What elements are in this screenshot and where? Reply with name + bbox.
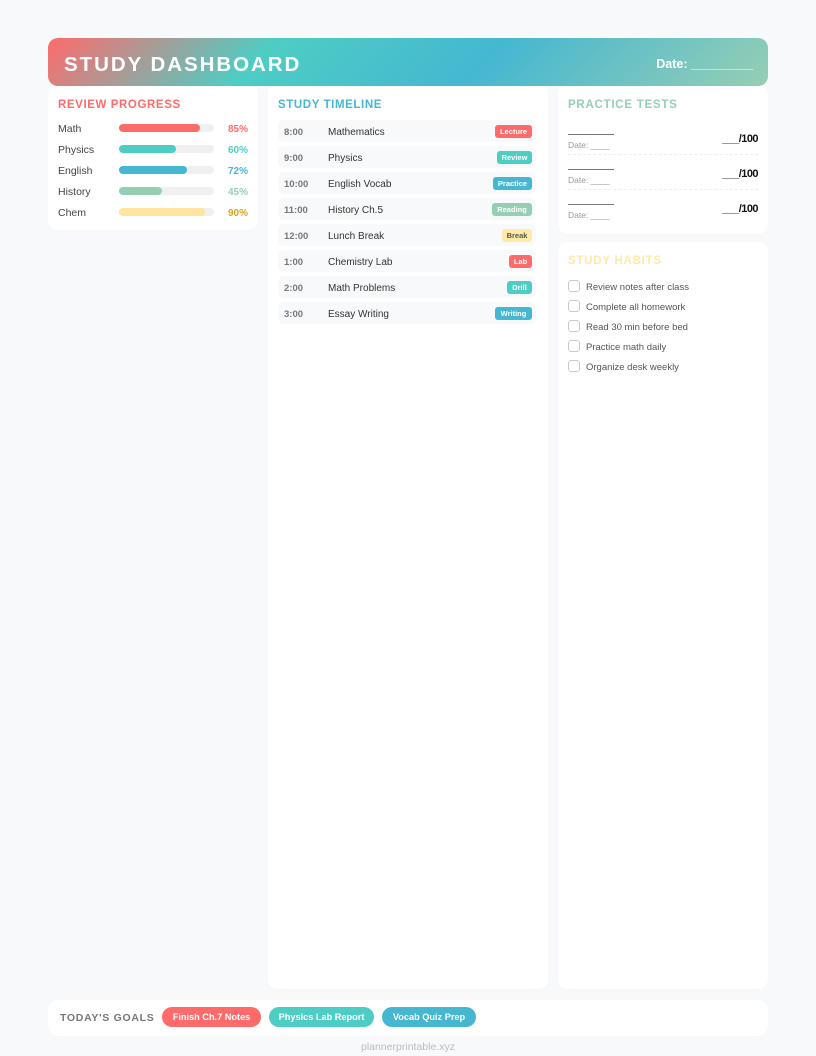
timeline row: 11:00: Reading bbox=[497, 205, 527, 214]
timeline row: 3:00: Writing bbox=[501, 309, 526, 318]
progress row: Math bbox=[58, 123, 248, 135]
goal pill: vocab quiz: Vocab Quiz Prep bbox=[393, 1012, 465, 1022]
goal pill: lab report bbox=[269, 1007, 374, 1027]
heading: practice tests: PRACTICE TESTS bbox=[568, 99, 678, 111]
habit: homework: Complete all homework bbox=[586, 302, 685, 313]
goal pill: lab report: Physics Lab Report bbox=[279, 1012, 364, 1022]
timeline row: 10:00: Practice bbox=[498, 179, 527, 188]
timeline row: 1:00: 1:00 bbox=[284, 257, 303, 268]
timeline row: 3:00 bbox=[278, 302, 536, 324]
timeline row: 8:00: Lecture bbox=[500, 127, 527, 136]
test row 1: ___/100 bbox=[722, 133, 758, 145]
progress row: Physics: Physics bbox=[58, 144, 94, 156]
timeline row: 1:00 bbox=[278, 250, 536, 272]
test row 2: ___/100 bbox=[722, 168, 758, 180]
heading: today's goals: TODAY'S GOALS bbox=[60, 1012, 154, 1024]
habit: reading: Read 30 min before bed bbox=[586, 322, 688, 333]
timeline row: 3:00: Essay Writing bbox=[328, 309, 389, 320]
progress row: Math: 85% bbox=[228, 124, 248, 135]
panel: study habits bbox=[558, 242, 768, 989]
timeline row: 10:00 bbox=[278, 172, 536, 194]
progress row: English: English bbox=[58, 165, 92, 177]
timeline row: 12:00 bbox=[278, 224, 536, 246]
habit: desk: Organize desk weekly bbox=[586, 362, 679, 373]
timeline row: 3:00: 3:00 bbox=[284, 309, 303, 320]
title: STUDY DASHBOARD bbox=[64, 53, 301, 76]
timeline row: 2:00: Math Problems bbox=[328, 283, 395, 294]
timeline row: 8:00: 8:00 bbox=[284, 127, 303, 138]
test row 1 bbox=[568, 120, 758, 155]
date field: Date: __________ bbox=[656, 57, 752, 71]
progress row: English: 72% bbox=[228, 166, 248, 177]
progress row: Physics bbox=[58, 144, 248, 156]
habit: review notes: Review notes after class bbox=[586, 282, 689, 293]
timeline row: 11:00: History Ch.5 bbox=[328, 205, 383, 216]
test row 1: Date: ____ bbox=[568, 140, 610, 150]
panel: today's goals bbox=[48, 1000, 768, 1036]
test row 2: Date: ____ bbox=[568, 175, 610, 185]
progress row: Chem: Chem bbox=[58, 207, 86, 219]
header banner bbox=[48, 38, 768, 86]
timeline row: 8:00: Mathematics bbox=[328, 127, 385, 138]
timeline row: 12:00: Lunch Break bbox=[328, 231, 384, 242]
footer source: plannerprintable.xyz bbox=[361, 1041, 455, 1053]
goal pill: vocab quiz bbox=[382, 1007, 476, 1027]
progress row: Chem bbox=[58, 207, 248, 219]
timeline row: 10:00: 10:00 bbox=[284, 179, 308, 190]
timeline row: 9:00: 9:00 bbox=[284, 153, 303, 164]
timeline row: 2:00: 2:00 bbox=[284, 283, 303, 294]
goal pill: finish notes bbox=[162, 1007, 261, 1027]
progress row: History: History bbox=[58, 186, 91, 198]
test row 3: ___/100 bbox=[722, 203, 758, 215]
test row 2 bbox=[568, 155, 758, 190]
timeline row: 12:00: 12:00 bbox=[284, 231, 308, 242]
timeline row: 12:00: Break bbox=[507, 231, 527, 240]
progress row: English bbox=[58, 165, 248, 177]
habit: math: Practice math daily bbox=[586, 342, 666, 353]
progress row: Physics: 60% bbox=[228, 145, 248, 156]
timeline row: 1:00: Lab bbox=[514, 257, 527, 266]
progress row: Math: Math bbox=[58, 123, 81, 135]
heading: review progress: REVIEW PROGRESS bbox=[58, 99, 181, 111]
heading: study timeline: STUDY TIMELINE bbox=[278, 99, 382, 111]
timeline row: 11:00 bbox=[278, 198, 536, 220]
test row 3: Date: ____ bbox=[568, 210, 610, 220]
progress row: History bbox=[58, 186, 248, 198]
progress row: Chem: 90% bbox=[228, 208, 248, 219]
timeline row: 2:00: Drill bbox=[512, 283, 527, 292]
panel: practice tests bbox=[558, 84, 768, 234]
timeline row: 11:00: 11:00 bbox=[284, 205, 308, 216]
habit: math bbox=[568, 340, 666, 353]
timeline row: 9:00: Physics bbox=[328, 153, 362, 164]
heading: study habits: STUDY HABITS bbox=[568, 255, 662, 267]
panel: study timeline bbox=[268, 84, 548, 989]
timeline row: 9:00 bbox=[278, 146, 536, 168]
timeline row: 8:00 bbox=[278, 120, 536, 142]
timeline row: 10:00: English Vocab bbox=[328, 179, 391, 190]
test row 3 bbox=[568, 203, 758, 220]
timeline row: 1:00: Chemistry Lab bbox=[328, 257, 392, 268]
progress row: History: 45% bbox=[228, 187, 248, 198]
timeline row: 9:00: Review bbox=[502, 153, 527, 162]
goal pill: finish notes: Finish Ch.7 Notes bbox=[173, 1012, 250, 1022]
timeline row: 2:00 bbox=[278, 276, 536, 298]
panel: review progress bbox=[48, 84, 258, 230]
